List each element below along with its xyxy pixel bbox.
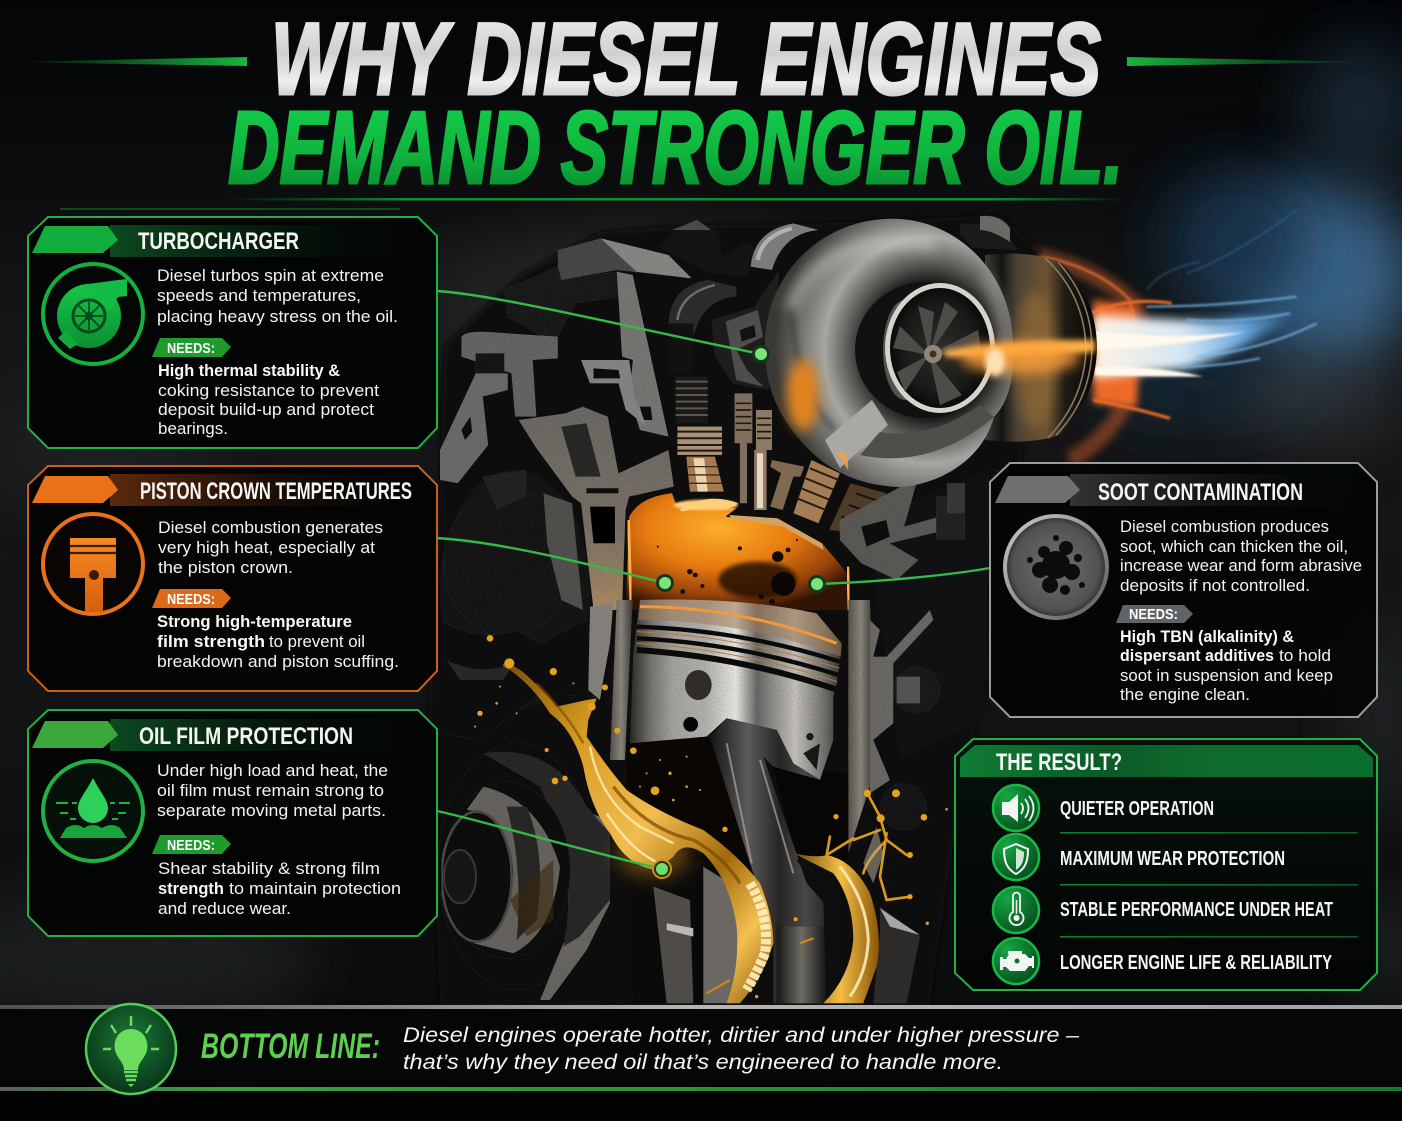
panel: turbocharger: TURBOCHARGER [138,228,299,255]
cast metal head frame [440,218,965,637]
panel: turbocharger: bearings. [158,419,228,438]
needs tag [152,589,231,608]
panel: soot contamination: to hold [1279,646,1331,665]
panel: turbocharger: placing heavy stress on the oil. [157,307,398,326]
panel: piston crown temperatures: to prevent oil [269,632,365,651]
needs tag: NEEDS: [167,837,215,854]
panel: oil film protection: to maintain protection [229,879,401,898]
panel: soot contamination: the engine clean. [1120,685,1250,704]
panel: piston crown temperatures: Strong high-temperature [157,612,352,631]
panel: oil film protection: oil film must remain strong to [157,781,384,800]
panel: piston crown temperatures: very high heat, especially at [158,538,375,557]
oil splash [474,635,948,1003]
panel: piston crown temperatures: PISTON CROWN TEMPERATURES [140,478,412,505]
title: WHY DIESEL ENGINES [271,2,1101,116]
icon: turbocharger [43,264,143,364]
piston [630,599,842,780]
panel: piston crown temperatures: the piston crown. [158,558,293,577]
result row: maximum wear protection [993,834,1285,880]
panel: turbocharger: Diesel turbos spin at extreme [157,266,384,285]
pipes, valve springs and stems [658,218,886,533]
result row: maximum wear protection: MAXIMUM WEAR PROTECTION [1060,847,1285,870]
panel: piston crown temperatures: breakdown and piston scuffing. [157,652,399,671]
needs tag: NEEDS: [167,340,215,357]
result row: quieter operation: QUIETER OPERATION [1060,797,1214,820]
needs tag: NEEDS: [1129,606,1178,623]
bottom line banner: BOTTOM LINE: [201,1027,380,1066]
panel: soot contamination [990,463,1377,717]
engine illustration [428,215,1097,1005]
panel: turbocharger: coking resistance to prevent [158,381,379,400]
needs tag [152,338,231,357]
needs tag: NEEDS: [167,591,215,608]
panel: oil film protection: and reduce wear. [158,899,291,918]
panel: soot contamination: deposits if not controlled. [1120,576,1310,595]
title [10,2,1375,205]
panel: oil film protection: strength [158,879,224,898]
panel: soot contamination: High TBN (alkalinity) & [1120,627,1294,646]
result row: longer engine life [993,938,1332,984]
turbine light streak [945,340,1095,376]
panel: oil film protection: Under high load and heat, the [157,761,388,780]
panel: turbocharger: deposit build-up and protect [158,400,374,419]
icon: oil drop [43,761,143,861]
result row: quieter operation [993,785,1214,831]
cavity behind piston [627,737,848,920]
flywheel [442,752,610,958]
panel: soot contamination: Diesel combustion produces [1120,517,1329,536]
compressor inlet [855,282,995,418]
panel: oil film protection: OIL FILM PROTECTION [139,723,353,750]
panel: piston crown temperatures: film strength [157,632,265,651]
panel: soot contamination: increase wear and form abrasive [1120,556,1362,575]
panel: piston crown temperatures: Diesel combustion generates [158,518,383,537]
panel: soot contamination: soot in suspension and keep [1120,666,1333,685]
exhaust flame and smoke [1030,210,1317,460]
bottom line banner: that’s why they need oil that’s engineered to handle more. [403,1050,1003,1074]
engine block dark mass [428,215,1040,1005]
panel: soot contamination: SOOT CONTAMINATION [1098,479,1303,506]
panel: oil film protection [28,710,437,936]
turbocharger [765,216,1097,487]
volute housing [765,219,1013,487]
result row: stable performance under heat [993,887,1333,933]
panel: soot contamination: soot, which can thicken the oil, [1120,537,1348,556]
panel: soot contamination: dispersant additives [1120,646,1274,665]
needs tag [152,835,231,854]
connecting rod and crankshaft [442,718,920,1003]
bottom line banner [0,1004,1402,1121]
rear turbine housing [960,216,1097,442]
panel: piston crown temperatures [28,466,437,691]
panel: the result [955,739,1377,990]
panel: oil film protection: separate moving metal parts. [157,801,386,820]
panel: oil film protection: Shear stability & strong film [158,859,380,878]
right cylinder wall and lower block [438,600,940,1000]
needs tag [1116,605,1193,623]
icon: piston [43,514,143,614]
panel: the result: THE RESULT? [996,749,1122,776]
icon: soot particle [1005,516,1107,618]
bottom line banner: Diesel engines operate hotter, dirtier and under higher pressure – [403,1023,1080,1047]
icon: light bulb [86,1004,176,1094]
combustion chamber [626,493,849,610]
panel: turbocharger: High thermal stability & [158,361,340,380]
panel: turbocharger [28,209,437,448]
panel: turbocharger: speeds and temperatures, [157,286,361,305]
connector lines and markers [437,291,990,879]
right bracket [840,477,965,580]
